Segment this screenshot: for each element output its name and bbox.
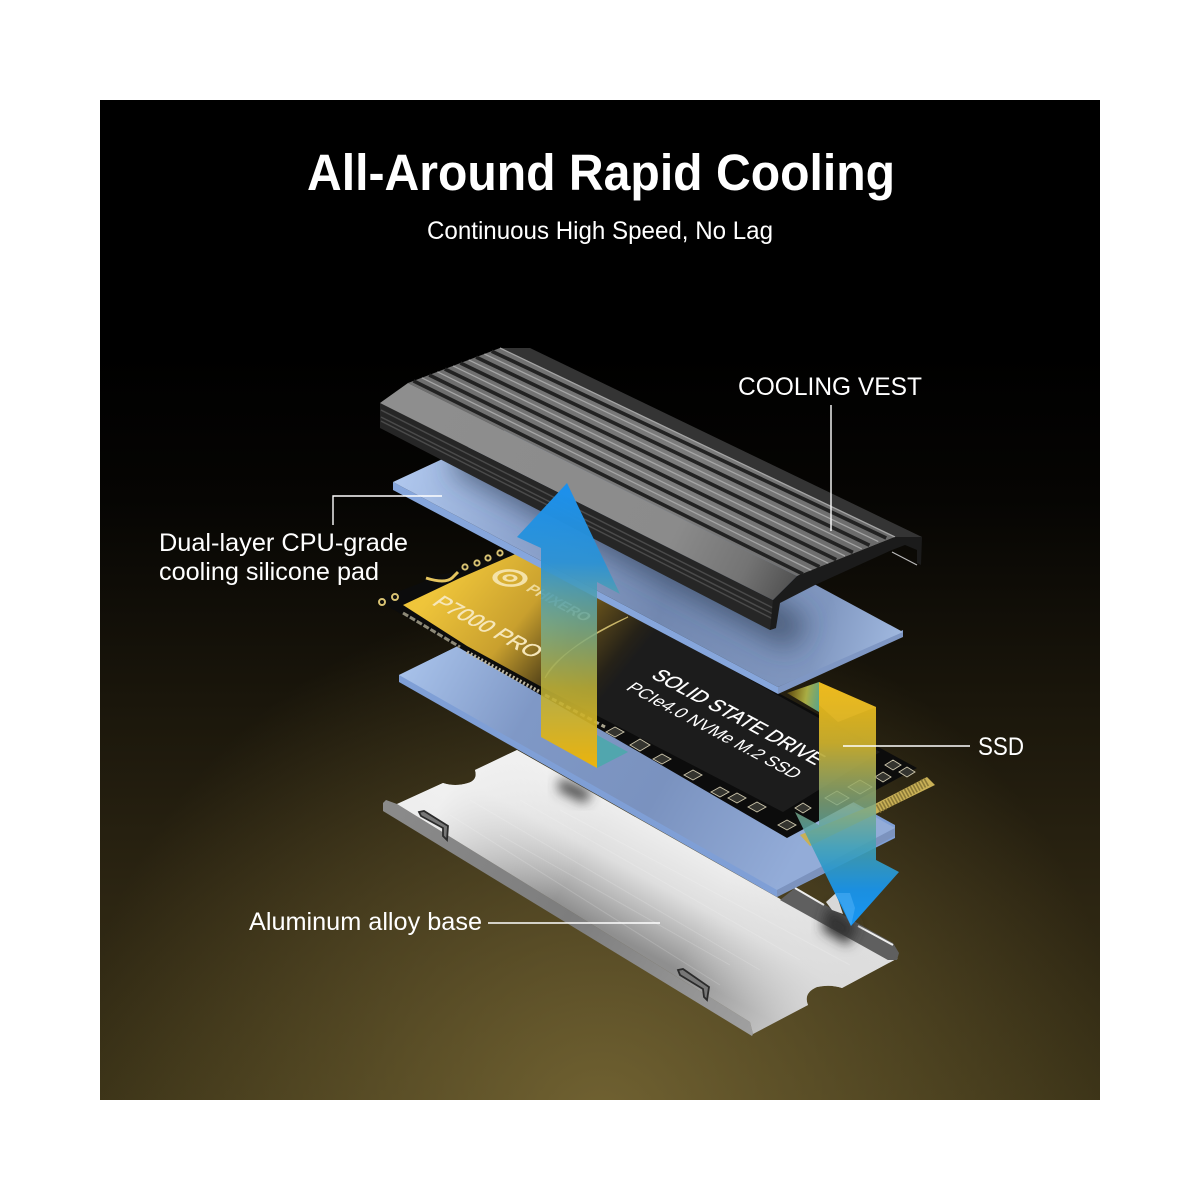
- label: silicone pad: cooling silicone pad: [159, 558, 379, 586]
- SSD label: [403, 552, 880, 812]
- pad shadows on base: [558, 778, 592, 803]
- upper silicone pad: [393, 424, 903, 694]
- vest end cap: [770, 537, 922, 630]
- subtitle: Continuous High Speed, No Lag: [427, 217, 773, 245]
- infographic canvas: [100, 100, 1100, 1100]
- title: All-Around Rapid Cooling: [307, 144, 895, 201]
- vest back strip: [500, 348, 922, 537]
- lower silicone pad: [399, 617, 895, 897]
- label: silicone pad: Dual-layer CPU-grade: [159, 529, 408, 557]
- gold mounting pads: [379, 550, 503, 605]
- board components: [403, 613, 915, 830]
- vest flat top: [380, 383, 797, 600]
- vest side wall: [380, 403, 776, 630]
- vest fin grooves: [414, 351, 886, 574]
- label: silicone pad: [159, 496, 442, 586]
- interface: PCIe4.0 NVMe M.2 SSD: [622, 679, 807, 782]
- aluminum alloy base: [383, 750, 899, 1036]
- label: aluminum alloy base: Aluminum alloy base: [249, 908, 482, 936]
- SSD: [377, 548, 935, 846]
- drive type: SOLID STATE DRIVE: [646, 666, 830, 768]
- back rim: [780, 888, 899, 960]
- heat arrow: upward: [517, 483, 628, 768]
- gold notch: [426, 572, 458, 581]
- circuit board: [377, 548, 917, 838]
- label: SSD: SSD: [978, 733, 1024, 761]
- label swoosh: [545, 617, 628, 678]
- brand logo: [489, 567, 531, 589]
- label: cooling vest: COOLING VEST: [738, 373, 922, 401]
- vest fin highlights: [422, 348, 895, 570]
- clip far side: [678, 969, 709, 1000]
- vest fin area: [408, 348, 895, 576]
- product name: P7000 PRO: [427, 592, 549, 662]
- cooling vest heatsink: [380, 348, 922, 630]
- rim tab under arrow tip: [826, 893, 843, 914]
- clip near side: [419, 811, 448, 840]
- background panel: [100, 100, 1100, 1100]
- gold edge connector: [800, 777, 935, 846]
- brand name: PHIXERO: [522, 582, 596, 625]
- heat arrow: downward: [787, 682, 899, 926]
